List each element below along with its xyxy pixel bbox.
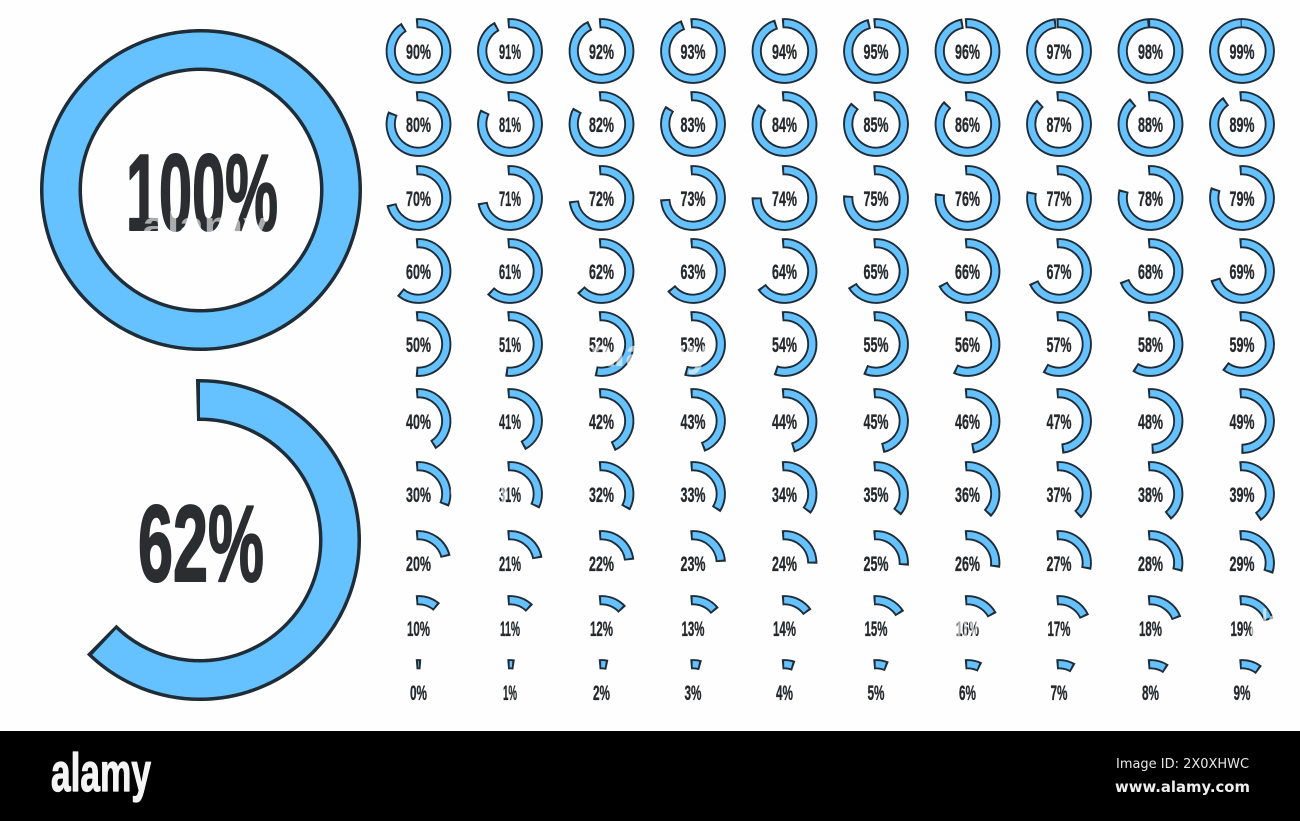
gauge: 92%: [571, 21, 632, 81]
gauge: 99%: [1212, 21, 1272, 81]
gauge: 84%: [754, 94, 815, 154]
gauge: 94%: 94%: [772, 40, 797, 64]
gauge: 19%: 19%: [1230, 617, 1254, 641]
row of gauges: 70 to 79 percent: [388, 168, 1272, 228]
gauge: 20%: 20%: [406, 552, 431, 576]
gauge: 85%: 85%: [864, 113, 888, 137]
gauge: 65%: [846, 241, 906, 301]
gauge: 20%: [388, 533, 449, 593]
gauge: 71%: 71%: [499, 187, 521, 211]
gauge: 18%: [1120, 598, 1181, 658]
faint watermark traces over the artwork: alamy: [450, 464, 510, 506]
large gauge: 62%: 62%: [138, 483, 264, 605]
gauge: 16%: 16%: [956, 617, 979, 641]
gauge: 9%: 9%: [1234, 681, 1250, 705]
gauge: 90%: 90%: [406, 40, 431, 64]
gauge: 96%: [937, 21, 998, 81]
gauge: 53%: [663, 314, 723, 374]
gauge: 55%: 55%: [864, 333, 888, 357]
gauge: 28%: [1120, 533, 1181, 593]
gauge: 0%: 0%: [410, 681, 427, 705]
gauge: 77%: 77%: [1046, 187, 1072, 211]
gauge: 61%: 61%: [499, 260, 521, 284]
gauge: 23%: [663, 533, 723, 593]
row of gauges: 20 to 29 percent: [388, 533, 1272, 593]
gauge: 46%: 46%: [955, 410, 980, 434]
gauge: 55%: [846, 314, 906, 374]
gauge: 84%: 84%: [772, 113, 797, 137]
gauge: 28%: 28%: [1138, 552, 1163, 576]
gauge: 95%: [846, 21, 906, 81]
gauge: 89%: [1212, 94, 1272, 154]
gauge: 48%: [1120, 391, 1181, 451]
faint watermark traces over the artwork: alamy: [920, 603, 980, 645]
gauge: 1%: [480, 662, 540, 722]
gauge: 48%: 48%: [1138, 410, 1163, 434]
gauge: 66%: [937, 241, 998, 301]
gauge: 68%: 68%: [1138, 260, 1163, 284]
gauge: 10%: [388, 598, 449, 658]
gauge: 81%: [480, 94, 540, 154]
gauge: 22%: 22%: [589, 552, 614, 576]
gauge: 86%: 86%: [955, 113, 980, 137]
gauge: 70%: 70%: [406, 187, 431, 211]
gauge: 11%: [480, 598, 540, 658]
gauge: 21%: 21%: [499, 552, 521, 576]
gauge: 83%: [663, 94, 723, 154]
gauge: 41%: [480, 391, 540, 451]
gauge: 22%: [571, 533, 632, 593]
gauge: 86%: [937, 94, 998, 154]
gauge: 74%: [754, 168, 815, 228]
row of gauges: 10 to 19 percent: [388, 598, 1272, 658]
gauge: 74%: 74%: [772, 187, 797, 211]
gauge: 62%: [571, 241, 632, 301]
gauge: 75%: 75%: [864, 187, 888, 211]
gauge: 47%: [1029, 391, 1089, 451]
row of gauges: 0 to 9 percent: [388, 662, 1272, 722]
gauge: 72%: [571, 168, 632, 228]
row of gauges: 40 to 49 percent: [388, 391, 1272, 451]
gauge: 60%: [388, 241, 449, 301]
row of gauges: 30 to 39 percent: [388, 464, 1272, 524]
gauge: 61%: [480, 241, 540, 301]
gauge: 54%: 54%: [772, 333, 797, 357]
footer website: www.alamy.com: [1115, 778, 1250, 796]
gauge: 36%: [937, 464, 998, 524]
gauge: 50%: 50%: [406, 333, 431, 357]
gauge: 67%: 67%: [1046, 260, 1072, 284]
gauge: 58%: 58%: [1138, 333, 1163, 357]
gauge: 30%: [388, 464, 449, 524]
gauge: 93%: 93%: [680, 40, 706, 64]
gauge: 6%: [937, 662, 998, 722]
gauge: 31%: 31%: [499, 483, 521, 507]
gauge: 31%: [480, 464, 540, 524]
gauge: 21%: [480, 533, 540, 593]
gauge: 34%: 34%: [772, 483, 797, 507]
gauge: 13%: [663, 598, 723, 658]
gauge: 54%: [754, 314, 815, 374]
gauge: 39%: [1212, 464, 1272, 524]
footer image id: Image ID: 2X0XHWC: [1116, 756, 1249, 772]
gauge: 14%: 14%: [773, 617, 796, 641]
gauge: 24%: 24%: [772, 552, 797, 576]
large gauge: 100%: 100%: [126, 132, 278, 254]
gauge: 49%: 49%: [1230, 410, 1254, 434]
gauge: 26%: [937, 533, 998, 593]
gauge: 43%: [663, 391, 723, 451]
gauge: 42%: 42%: [589, 410, 614, 434]
gauge: 83%: 83%: [680, 113, 706, 137]
gauge: 10%: 10%: [407, 617, 430, 641]
gauge: 44%: 44%: [772, 410, 797, 434]
gauge: 78%: 78%: [1138, 187, 1163, 211]
gauge: 58%: [1120, 314, 1181, 374]
faint watermark traces over the artwork: alamy: [142, 205, 268, 247]
gauge: 29%: 29%: [1230, 552, 1254, 576]
gauge: 64%: [754, 241, 815, 301]
gauge: 88%: [1120, 94, 1181, 154]
footer logo: alamy: alamy: [51, 743, 151, 803]
gauge: 82%: [571, 94, 632, 154]
gauge: 4%: [754, 662, 815, 722]
gauge: 53%: 53%: [680, 333, 706, 357]
gauge: 39%: 39%: [1230, 483, 1254, 507]
gauge: 97%: [1029, 21, 1089, 81]
gauge: 94%: [754, 21, 815, 81]
gauge: 3%: [663, 662, 723, 722]
gauge: 80%: 80%: [406, 113, 431, 137]
gauge: 89%: 89%: [1230, 113, 1254, 137]
gauge: 33%: [663, 464, 723, 524]
gauge: 72%: 72%: [589, 187, 614, 211]
gauge: 15%: 15%: [864, 617, 888, 641]
large gauge: 62%: [57, 397, 343, 683]
gauge: 64%: 64%: [772, 260, 797, 284]
gauge: 56%: 56%: [955, 333, 980, 357]
gauge: 85%: [846, 94, 906, 154]
gauge: 79%: 79%: [1230, 187, 1254, 211]
gauge: 57%: [1029, 314, 1089, 374]
gauge: 56%: [937, 314, 998, 374]
gauge: 79%: [1212, 168, 1272, 228]
gauge: 38%: [1120, 464, 1181, 524]
gauge: 81%: 81%: [499, 113, 521, 137]
gauge: 66%: 66%: [955, 260, 980, 284]
gauge: 8%: [1120, 662, 1181, 722]
gauge: 16%: [937, 598, 998, 658]
gauge: 11%: 11%: [500, 617, 520, 641]
gauge: 93%: [663, 21, 723, 81]
gauge: 32%: [571, 464, 632, 524]
gauge: 46%: [937, 391, 998, 451]
gauge: 95%: 95%: [864, 40, 888, 64]
gauge: 15%: [846, 598, 906, 658]
gauge: 3%: 3%: [684, 681, 702, 705]
gauge: 51%: [480, 314, 540, 374]
gauge: 88%: 88%: [1138, 113, 1163, 137]
gauge: 25%: [846, 533, 906, 593]
row of gauges: 90 to 99 percent: [388, 21, 1272, 81]
footer bar: [0, 731, 1300, 821]
gauge: 18%: 18%: [1139, 617, 1162, 641]
gauge: 7%: 7%: [1050, 681, 1068, 705]
gauge: 87%: [1029, 94, 1089, 154]
gauge: 73%: 73%: [680, 187, 706, 211]
gauge: 29%: [1212, 533, 1272, 593]
gauge: 75%: [846, 168, 906, 228]
gauge: 12%: 12%: [590, 617, 613, 641]
gauge: 44%: [754, 391, 815, 451]
gauge: 34%: [754, 464, 815, 524]
gauge: 30%: 30%: [406, 483, 431, 507]
gauge: 57%: 57%: [1046, 333, 1072, 357]
gauge: 91%: 91%: [499, 40, 521, 64]
gauge: 13%: 13%: [682, 617, 704, 641]
gauge: 2%: [571, 662, 632, 722]
gauge: 26%: 26%: [955, 552, 980, 576]
gauge: 70%: [388, 168, 449, 228]
faint watermark traces over the artwork: alamy: [590, 333, 710, 375]
gauge: 76%: [937, 168, 998, 228]
gauge: 4%: 4%: [776, 681, 793, 705]
gauge: 35%: [846, 464, 906, 524]
gauge: 27%: [1029, 533, 1089, 593]
gauge: 69%: 69%: [1230, 260, 1254, 284]
large gauge: 100%: [58, 47, 344, 333]
gauge: 99%: 99%: [1230, 40, 1254, 64]
gauge: 63%: [663, 241, 723, 301]
gauge: 45%: 45%: [864, 410, 888, 434]
gauge: 63%: 63%: [680, 260, 706, 284]
row of gauges: 50 to 59 percent: [388, 314, 1272, 374]
gauge: 71%: [480, 168, 540, 228]
gauge: 42%: [571, 391, 632, 451]
gauge: 9%: [1212, 662, 1272, 722]
gauge: 62%: 62%: [589, 260, 614, 284]
gauge: 69%: [1212, 241, 1272, 301]
gauge: 33%: 33%: [680, 483, 706, 507]
gauge: 90%: [388, 21, 449, 81]
gauge: 37%: [1029, 464, 1089, 524]
gauge: 32%: 32%: [589, 483, 614, 507]
gauge: 98%: 98%: [1138, 40, 1163, 64]
gauge: 0%: [388, 662, 449, 722]
gauge: 5%: [846, 662, 906, 722]
gauge: 59%: 59%: [1230, 333, 1254, 357]
gauge: 45%: [846, 391, 906, 451]
gauge: 87%: 87%: [1046, 113, 1072, 137]
gauge: 92%: 92%: [589, 40, 614, 64]
gauge: 40%: [388, 391, 449, 451]
gauge: 82%: 82%: [589, 113, 614, 137]
gauge: 68%: [1120, 241, 1181, 301]
gauge: 19%: [1212, 598, 1272, 658]
gauge: 80%: [388, 94, 449, 154]
gauge: 51%: 51%: [499, 333, 521, 357]
gauge: 77%: [1029, 168, 1089, 228]
gauge: 96%: 96%: [955, 40, 980, 64]
gauge: 43%: 43%: [680, 410, 706, 434]
faint watermark traces over the artwork: [142, 205, 1300, 645]
gauge: 91%: [480, 21, 540, 81]
gauge: 52%: [571, 314, 632, 374]
gauge: 52%: 52%: [589, 333, 614, 357]
gauge: 98%: [1120, 21, 1181, 81]
gauge: 78%: [1120, 168, 1181, 228]
gauge: 50%: [388, 314, 449, 374]
gauge: 7%: [1029, 662, 1089, 722]
gauge: 23%: 23%: [680, 552, 706, 576]
gauge: 49%: [1212, 391, 1272, 451]
gauge: 36%: 36%: [955, 483, 980, 507]
gauge: 6%: 6%: [959, 681, 976, 705]
gauge: 37%: 37%: [1046, 483, 1072, 507]
gauge: 17%: 17%: [1048, 617, 1070, 641]
gauge: 97%: 97%: [1046, 40, 1072, 64]
row of gauges: 80 to 89 percent: [388, 94, 1272, 154]
gauge: 40%: 40%: [406, 410, 431, 434]
gauge: 60%: 60%: [406, 260, 431, 284]
gauge: 76%: 76%: [955, 187, 980, 211]
gauge: 65%: 65%: [864, 260, 888, 284]
gauge: 2%: 2%: [593, 681, 610, 705]
gauge: 1%: 1%: [503, 681, 517, 705]
gauge: 24%: [754, 533, 815, 593]
gauge: 73%: [663, 168, 723, 228]
gauge: 12%: [571, 598, 632, 658]
gauge: 17%: [1029, 598, 1089, 658]
row of gauges: 60 to 69 percent: [388, 241, 1272, 301]
gauge: 59%: [1212, 314, 1272, 374]
gauge: 41%: 41%: [499, 410, 521, 434]
gauge: 25%: 25%: [864, 552, 888, 576]
gauge: 35%: 35%: [864, 483, 888, 507]
gauge: 14%: [754, 598, 815, 658]
gauge: 47%: 47%: [1046, 410, 1072, 434]
gauge: 5%: 5%: [868, 681, 884, 705]
gauge: 8%: 8%: [1142, 681, 1159, 705]
gauge: 27%: 27%: [1046, 552, 1072, 576]
gauge: 38%: 38%: [1138, 483, 1163, 507]
gauge: 67%: [1029, 241, 1089, 301]
